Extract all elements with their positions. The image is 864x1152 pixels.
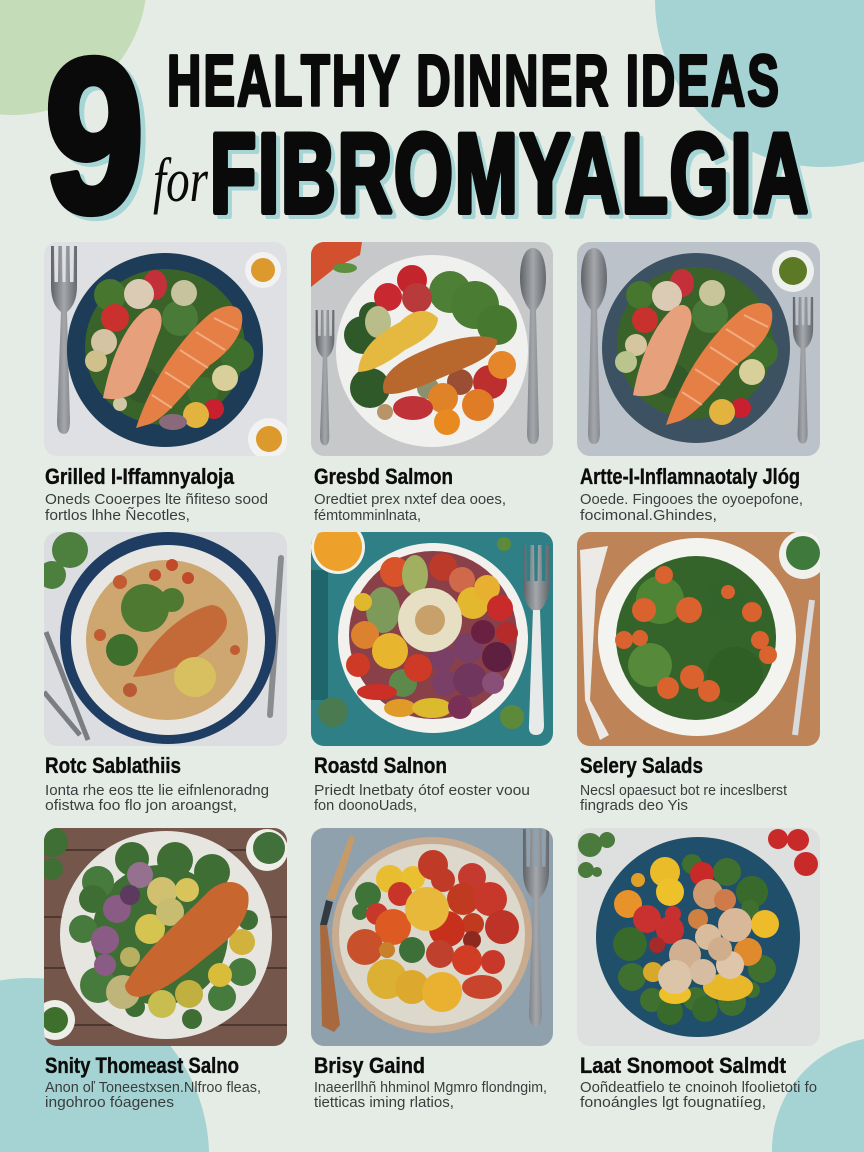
dish 1 caption [45,464,268,524]
dish 2 caption [314,464,506,524]
dish 4 caption: ofistwa foo flo jon aroangst, [45,797,237,814]
panel: dish 9 photo [577,828,820,1046]
dish 6 caption: Necsl opaesuct bot re inceslberst [580,782,788,799]
dish 9 caption: Laat Snomoot Salmdt [580,1053,787,1078]
dish 5 caption [314,753,530,814]
dish 8 caption [314,1053,547,1111]
dish 3 caption: focimonal.Ghindes, [580,507,717,524]
dish 4 caption [45,753,269,814]
dish 9 caption [580,1053,817,1111]
dish 7 caption: Anon oľ Toneestxsen.Nlfroo fleas, [45,1079,261,1096]
dish 5 caption: fon doonoUads, [314,797,417,814]
panel: dish 6 photo [577,531,827,746]
dish 4 caption: Rotc Sablathiis [45,753,181,778]
decorative circle: top left green [0,0,146,115]
dish 6 caption [580,753,788,814]
dish 3 caption [580,464,803,524]
dish 8 caption: Brisy Gaind [314,1053,425,1078]
title: for script: for [153,147,209,215]
dish 2 caption: fémtomminlnata, [314,507,421,524]
dish 5 caption: Roastd Salnon [314,753,447,778]
decorative circle: bottom right teal [772,1039,864,1152]
dish 1 caption: fortlos lhhe Ñecotles, [45,507,190,524]
dish 3 caption: Artte-I-Inflamnaotaly Jlóg [580,464,800,489]
dish 6 caption: Selery Salads [580,753,703,778]
dish 4 caption: Ionta rhe eos tte lie eifnlenoradng [45,782,269,799]
dish 2 caption: Gresbd Salmon [314,464,453,489]
dish 9 caption: fonoángles lgt fougnatiíeg, [580,1094,766,1111]
dish 7 caption: Snity Thomeast Salno [45,1053,239,1078]
panel: dish 3 photo [577,242,820,456]
dish 3 caption: Ooede. Fingooes the oyoepofone, [580,491,803,508]
decorative circle: bottom left teal [0,978,209,1152]
dish 1 caption: Oneds Cooerpes lte ñfiteso sood [45,491,268,508]
panel: dish 4 photo [38,532,287,746]
dish 6 caption: fingrads deo Yis [580,797,688,814]
panel: dish 1 photo [44,242,290,460]
dish 5 caption: Priedt lnetbaty ótof eoster voou [314,782,530,799]
panel: dish 8 photo [311,828,553,1046]
decorative circle: top right teal [655,0,864,167]
dish 8 caption: Inaeerllhñ hhminol Mgmro flondngim, [314,1079,547,1096]
dish 2 caption: Oredtiet prex nxtef dea ooes, [314,491,506,508]
dish 7 caption: ingohroo fóagenes [45,1094,174,1111]
panel: dish 2 photo [311,242,553,456]
title: big number 9: 9 [45,15,144,258]
dish 1 caption: Grilled I-Iffamnyaloja [45,464,235,489]
dish 8 caption: tietticas iming rlatios, [314,1094,454,1111]
panel: dish 5 photo [311,520,553,746]
panel: dish 7 photo [35,827,288,1046]
dish 9 caption: Ooñdeatfielo te cnoinoh lfoolietoti fo [580,1079,817,1096]
dish 7 caption [45,1053,261,1111]
